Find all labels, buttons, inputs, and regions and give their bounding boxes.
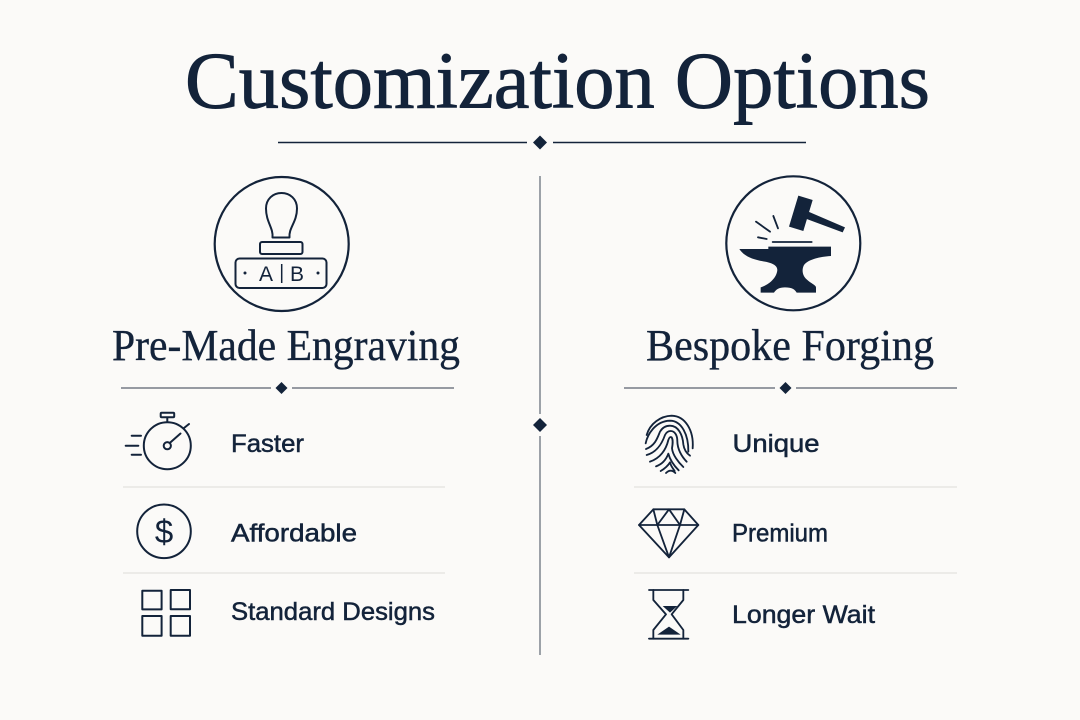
label: faster: Faster bbox=[231, 430, 304, 458]
label: longer wait: Longer Wait bbox=[732, 601, 875, 629]
central vertical divider bbox=[533, 176, 547, 655]
panel: pre-made engraving bbox=[112, 177, 460, 636]
heading: pre-made engraving: Pre-Made Engraving bbox=[112, 321, 460, 370]
icon: stamp bbox=[215, 177, 349, 311]
icon: grid bbox=[142, 590, 190, 636]
icon: hourglass bbox=[649, 590, 688, 639]
title: Customization Options bbox=[185, 36, 930, 126]
label: premium: Premium bbox=[732, 520, 828, 548]
icon: anvil and hammer bbox=[726, 176, 860, 310]
heading: bespoke forging: Bespoke Forging bbox=[646, 321, 934, 370]
icon: dollar: $ bbox=[155, 513, 173, 550]
icon: stamp: B bbox=[290, 263, 304, 286]
icon: diamond bbox=[639, 509, 698, 557]
heading divider bbox=[624, 382, 957, 394]
title divider bbox=[278, 136, 806, 150]
heading divider bbox=[121, 382, 454, 394]
icon: stamp: A bbox=[259, 263, 273, 286]
label: unique: Unique bbox=[732, 430, 820, 458]
icon: dollar bbox=[137, 504, 191, 558]
label: affordable: Affordable bbox=[231, 520, 357, 548]
icon: stopwatch bbox=[126, 413, 191, 469]
icon: fingerprint bbox=[646, 416, 693, 473]
panel: bespoke forging bbox=[624, 176, 957, 639]
label: standard designs: Standard Designs bbox=[231, 598, 435, 626]
